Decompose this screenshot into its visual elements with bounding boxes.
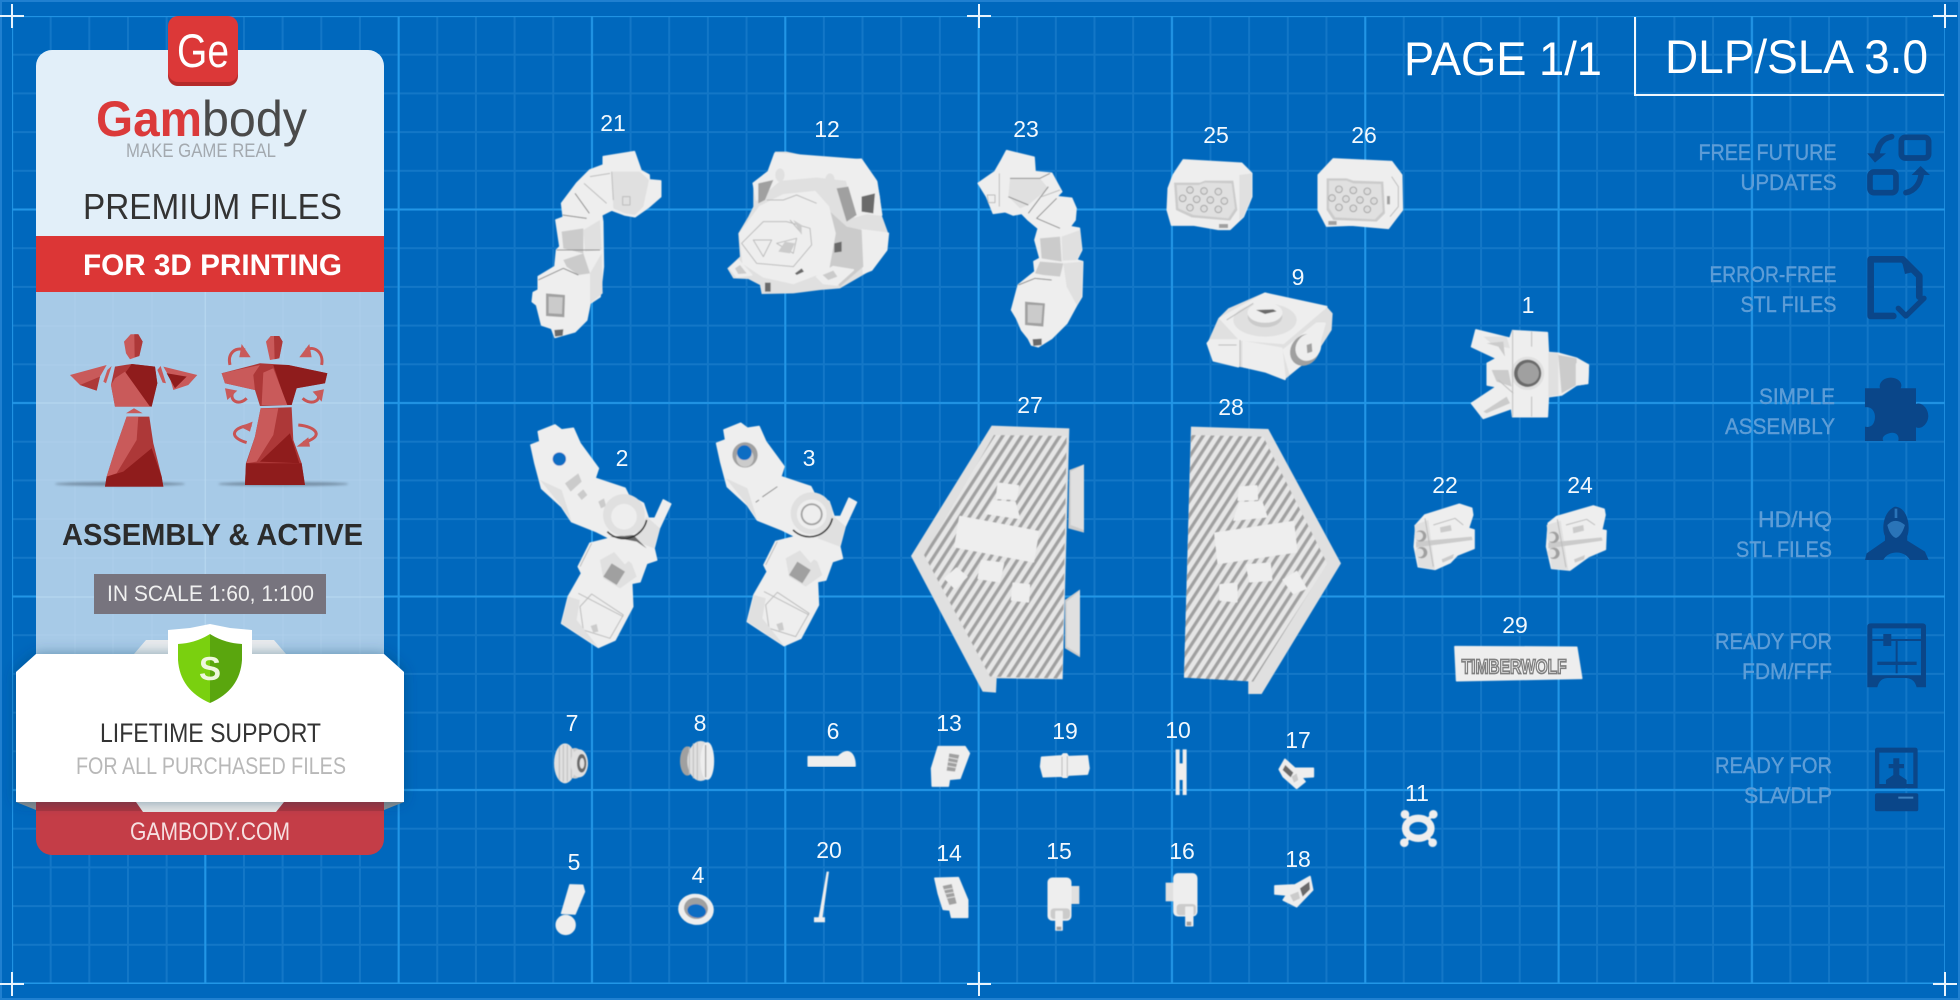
feature: hd hq stl files: STL FILES [1736, 537, 1832, 562]
part 4: 4 [692, 862, 705, 888]
wordmark: Gam [96, 91, 202, 147]
feature: ready for fdm fff [1715, 623, 1926, 687]
heading: assembly and active: ASSEMBLY & ACTIVE [62, 517, 363, 552]
feature: ready for sla dlp: SLA/DLP [1744, 783, 1832, 808]
icon: shield [168, 624, 252, 703]
part 27 [911, 392, 1084, 693]
wordmark [96, 91, 307, 147]
part 15 [1046, 838, 1079, 930]
part 15: 15 [1046, 838, 1072, 864]
part 5 [556, 849, 584, 934]
part 5: 5 [568, 849, 580, 875]
part 2 [531, 425, 671, 647]
feature: ready for sla dlp: READY FOR [1715, 753, 1832, 778]
part 24 [1547, 472, 1606, 570]
feature: error-free stl files: ERROR-FREE [1710, 262, 1836, 287]
part 29 [1455, 612, 1582, 681]
part 20 [814, 837, 842, 922]
gambody.com footer: GAMBODY.COM [130, 818, 290, 846]
part 4 [677, 862, 715, 927]
part 21: 21 [600, 110, 626, 136]
scale badge: IN SCALE 1:60, 1:100 [107, 581, 314, 606]
support card [16, 624, 404, 812]
part 12 [727, 116, 888, 294]
part 16: 16 [1169, 838, 1195, 864]
feature: simple assembly: ASSEMBLY [1725, 414, 1835, 439]
part 13: 13 [936, 710, 962, 736]
feature: simple assembly [1725, 378, 1928, 441]
part 6: 6 [827, 718, 839, 744]
feature: hd hq stl files [1736, 507, 1929, 562]
part 22: 22 [1432, 472, 1458, 498]
part 9: 9 [1292, 264, 1304, 290]
part 1 [1472, 292, 1588, 418]
feature: error-free stl files [1710, 259, 1924, 317]
heading: premium files: PREMIUM FILES [83, 186, 342, 227]
part 1: 1 [1522, 292, 1534, 318]
icon: exploded figure [55, 334, 348, 487]
part 18: 18 [1285, 846, 1311, 872]
part 7: 7 [566, 710, 578, 736]
part 28 [1184, 394, 1341, 694]
part 14: 14 [936, 840, 962, 866]
scale badge [94, 574, 326, 614]
panel blue body [36, 292, 384, 672]
feature: error-free stl files: STL FILES [1740, 292, 1836, 317]
gambody.com footer [36, 795, 384, 855]
feature: ready for sla dlp [1715, 748, 1918, 811]
part 17: 17 [1285, 727, 1311, 753]
part 11: 11 [1405, 780, 1429, 806]
part 18 [1275, 846, 1313, 907]
feature: simple assembly: SIMPLE [1759, 384, 1835, 409]
feature: free future updates: FREE FUTURE [1698, 140, 1836, 165]
header: page number: PAGE 1/1 [1404, 32, 1602, 85]
tagline: MAKE GAME REAL [126, 141, 276, 162]
part 8 [680, 710, 714, 781]
part 12: 12 [814, 116, 840, 142]
part 13 [932, 710, 969, 786]
part 19 [1041, 718, 1089, 777]
support subheading: FOR ALL PURCHASED FILES [76, 753, 346, 780]
panel top light area [36, 50, 384, 236]
part 28: 28 [1218, 394, 1244, 420]
part 16 [1166, 838, 1197, 926]
logo badge: Ge [177, 24, 229, 77]
part 19: 19 [1052, 718, 1078, 744]
part 3: 3 [803, 445, 815, 471]
red band: for 3D printing [36, 236, 384, 292]
logo badge [168, 16, 238, 86]
part 11 [1400, 780, 1438, 847]
feature: ready for fdm fff: FDM/FFF [1742, 659, 1832, 684]
part 2: 2 [616, 445, 628, 471]
part 25: 25 [1203, 122, 1229, 148]
part 29: 29 [1502, 612, 1528, 638]
feature: ready for fdm fff: READY FOR [1715, 629, 1832, 654]
icon: shield: S [199, 650, 221, 687]
part 3 [717, 423, 856, 646]
part 27: 27 [1017, 392, 1043, 418]
support heading: LIFETIME SUPPORT [100, 718, 321, 748]
part 25 [1167, 122, 1252, 229]
feature: free future updates: UPDATES [1740, 170, 1836, 195]
part 10: 10 [1165, 717, 1191, 743]
part 8: 8 [694, 710, 706, 736]
part 26: 26 [1351, 122, 1377, 148]
part 22 [1414, 472, 1474, 569]
feature: hd hq stl files: HD/HQ [1758, 507, 1832, 532]
part 17 [1279, 727, 1313, 788]
part 9 [1207, 264, 1333, 379]
part 23 [978, 116, 1083, 347]
part 14 [935, 840, 968, 917]
part 26 [1318, 122, 1402, 228]
panel: Gambody promo sidebar [16, 16, 404, 855]
part 29: TIMBERWOLF [1462, 655, 1567, 678]
part 23: 23 [1013, 116, 1039, 142]
part 24: 24 [1567, 472, 1593, 498]
feature list [1698, 137, 1930, 811]
header: format box [1635, 17, 1944, 95]
part 21 [532, 110, 661, 337]
part 10 [1165, 717, 1191, 795]
header: format box: DLP/SLA 3.0 [1665, 30, 1928, 83]
wordmark: body [202, 91, 307, 147]
red band: for 3D printing: FOR 3D PRINTING [83, 249, 342, 282]
part 20: 20 [816, 837, 842, 863]
part 6 [808, 718, 855, 766]
part 7 [554, 710, 588, 783]
feature: free future updates [1698, 137, 1930, 195]
